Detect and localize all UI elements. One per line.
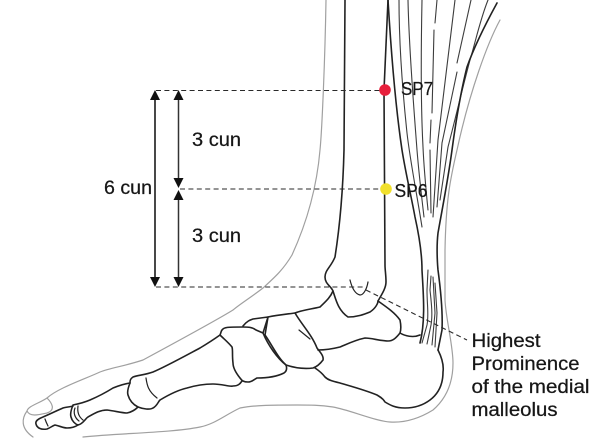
SP7 level: [156, 90, 382, 92]
label: SP7: SP7: [401, 79, 433, 99]
foot bones: [36, 291, 420, 429]
label: highest prominence of the medial malleolus: [472, 331, 590, 421]
tibia: [325, 0, 388, 317]
malleolus level: [156, 286, 366, 288]
leader to malleolus label: [366, 290, 467, 340]
cuneiforms: [243, 317, 268, 333]
SP6 level: [180, 188, 382, 190]
arrow: upper 3 cun span: [174, 90, 184, 188]
label: highest prominence of the medial malleolus: of the medial: [472, 377, 590, 398]
arrow: lower 3 cun span: [174, 190, 184, 287]
arrow: 6 cun span: [150, 90, 160, 287]
tendons and muscle lines: [399, 0, 488, 347]
skin outline: [23, 0, 500, 437]
Achilles tendon and heel contour: [315, 0, 497, 408]
point: SP7: [379, 84, 391, 96]
label: upper 3 cun: 3 cun: [192, 130, 241, 151]
phalanges: [71, 383, 138, 425]
label: lower 3 cun: 3 cun: [192, 226, 241, 247]
talus and calcaneus: [295, 291, 333, 313]
label: highest prominence of the medial malleolus: malleolus: [472, 400, 558, 421]
label: SP6: SP6: [394, 181, 428, 201]
metatarsal: [128, 335, 242, 409]
point: SP6: [380, 183, 392, 195]
navicular: [265, 313, 323, 368]
label: 6 cun: 6 cun: [104, 178, 152, 199]
measurement guide lines: [156, 90, 467, 340]
label: highest prominence of the medial malleolus: Prominence: [472, 354, 580, 375]
label: highest prominence of the medial malleolus: Highest: [472, 331, 541, 352]
foot and leg illustration: [23, 0, 500, 437]
